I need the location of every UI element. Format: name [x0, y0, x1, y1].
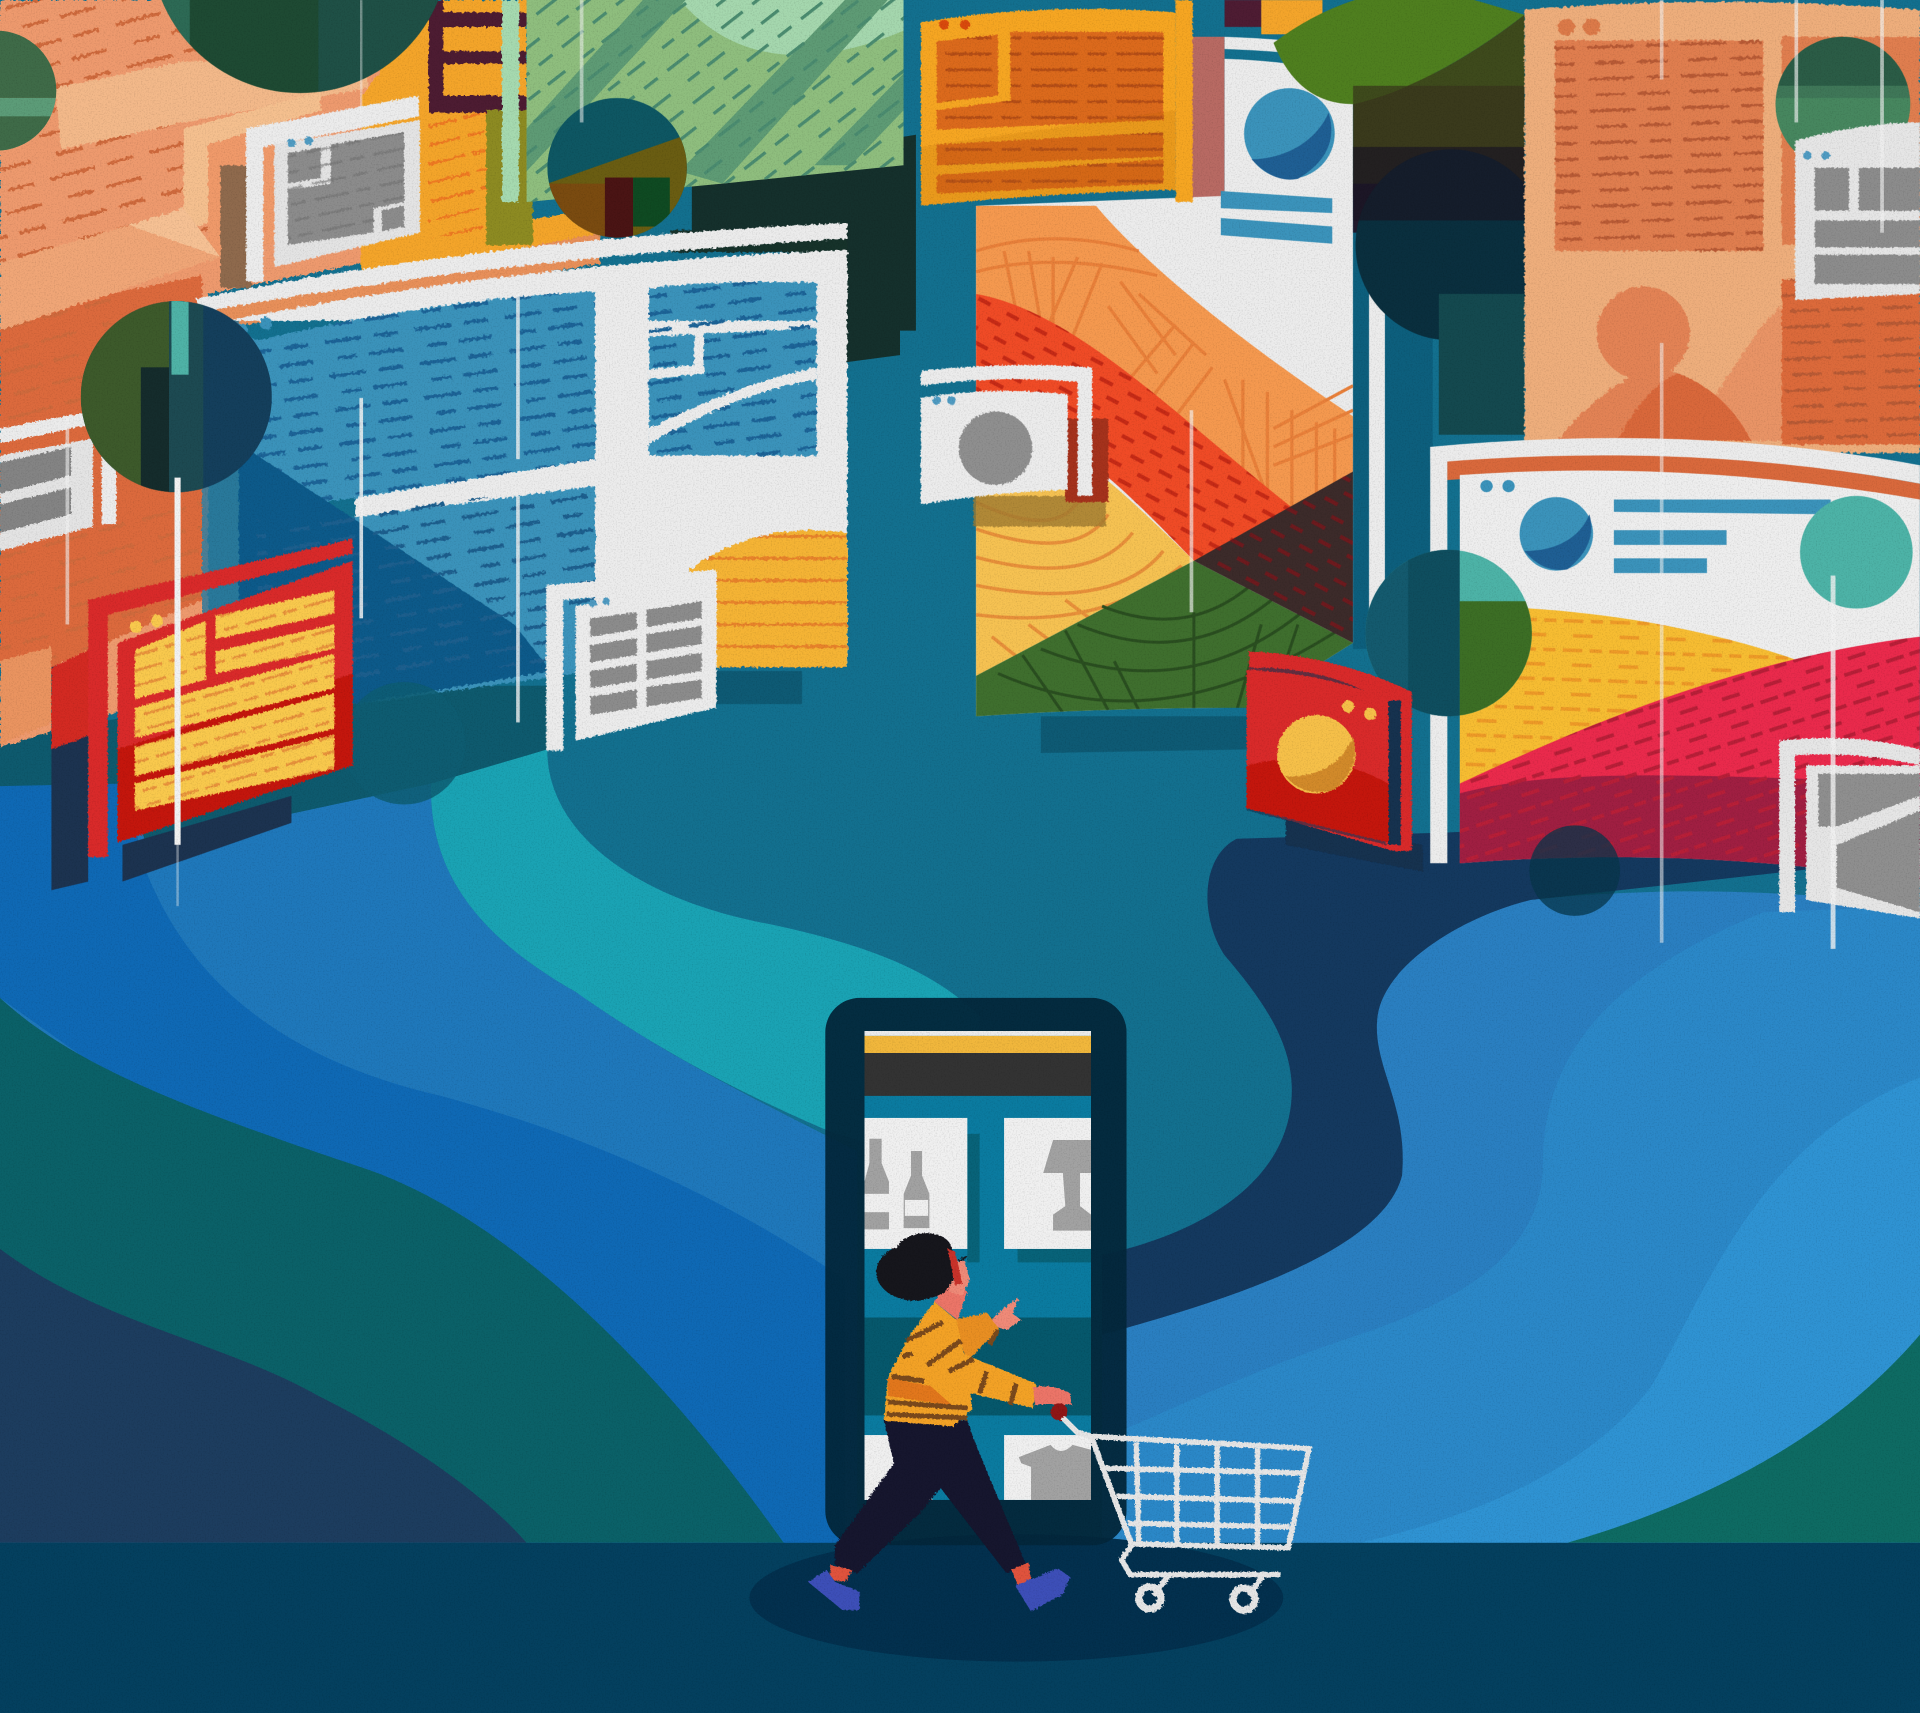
panel: small red page with yellow circle: [1247, 651, 1423, 872]
blue text bars: [1221, 191, 1332, 213]
cart wheels: [1139, 1587, 1161, 1609]
phone body: [825, 998, 1127, 1545]
ground shadow under shopper: [749, 1534, 1283, 1662]
blue avatar circle: [1520, 497, 1593, 571]
cart base: [1122, 1545, 1281, 1595]
avatar head: [1597, 287, 1690, 380]
dark maroon triangle: [1194, 471, 1353, 643]
panel: red page with yellow blocks: [51, 539, 353, 857]
red band: [976, 294, 1300, 561]
frame bar: [196, 223, 847, 312]
yellow blocks: [135, 590, 334, 811]
green band: [976, 561, 1353, 722]
yellow hill: [683, 530, 847, 667]
text block: [1555, 40, 1763, 251]
blue profile circle: [1244, 88, 1335, 179]
yellow hill: [1460, 606, 1800, 784]
orange gap behind frame: [202, 233, 600, 328]
phone screen: [864, 1031, 1091, 1500]
sweater arm pushing: [940, 1349, 1036, 1408]
left shoe: [808, 1570, 860, 1610]
circle: dark, left: [81, 301, 272, 492]
panel: amber page with purple bars, top centre: [361, 0, 600, 276]
panel: small white page with gray circle: [921, 365, 1108, 527]
circle: green, far left: [0, 24, 73, 165]
blue text bars: [1614, 500, 1831, 514]
sweater arm pointing: [953, 1313, 999, 1362]
panel: gray page bottom right: [1779, 738, 1920, 918]
dark backdrop: olive leaf and navy circle, top right: [1224, 0, 1547, 435]
circle: dark green, top left: [147, 0, 453, 98]
headband: [948, 1249, 962, 1286]
product tile: t-shirt: [1004, 1435, 1091, 1500]
neck and face: [934, 1280, 967, 1320]
panel: amber page top centre: [921, 0, 1193, 206]
panel: large white browser page with blue blocks: [196, 223, 847, 704]
product tile: partial item: [864, 1435, 933, 1500]
window dots: [235, 323, 247, 335]
circle: teal and green, right: [1365, 550, 1533, 716]
sweater shadow: [888, 1378, 953, 1406]
avatar shoulders: [1558, 361, 1751, 441]
cart handle: [1063, 1418, 1091, 1436]
panel: small gray page, top left: [246, 96, 420, 282]
circle: dark teal bottom right: [1529, 825, 1620, 916]
product tile: bottles: [864, 1118, 967, 1249]
circle: teal, bottom centre left: [343, 682, 465, 804]
product tile: lamp: [1004, 1118, 1091, 1249]
orange knitted band: [976, 206, 1353, 520]
phone: [825, 998, 1127, 1545]
pink hill: [1460, 637, 1920, 882]
ankles: [830, 1565, 852, 1582]
ground: [0, 1543, 1920, 1713]
white page body: [227, 250, 847, 686]
panel: peach profile page, top right: [1524, 2, 1920, 453]
hands: [1033, 1386, 1071, 1404]
right shoe: [1015, 1569, 1070, 1611]
panel: small gray page, far left: [0, 407, 116, 551]
panel: white page with yellow and pink hills, right: [1430, 438, 1920, 882]
dark shadow behind green page: [692, 135, 916, 362]
shadow under tall page: [1041, 716, 1249, 753]
panel: tall page with colourful waves: [967, 37, 1433, 722]
sweater body: [884, 1302, 972, 1426]
panel: peach page top left: [0, 0, 514, 747]
panel: green striped page: [527, 0, 904, 202]
right column: [1782, 279, 1920, 444]
background: flowing wave layers on the left: [0, 686, 980, 1555]
blue backing column: [202, 321, 239, 621]
circle: teal and olive, top centre: [547, 98, 687, 239]
shopper: [808, 1233, 1071, 1611]
yellow curved band: [976, 480, 1194, 676]
shadow: dark behind red page: [51, 655, 291, 890]
teal circle: [1800, 496, 1913, 609]
background: flowing wave layers on the right: [1102, 808, 1920, 1545]
panel: gray grid page, centre left: [546, 569, 716, 751]
right blue block: [649, 282, 817, 321]
dark shadow under large page: [716, 671, 802, 704]
legs: [835, 1420, 1026, 1573]
circle: green, top right: [1775, 36, 1910, 151]
shadow band across waves: [0, 686, 547, 845]
falling white streaks: [67, 0, 1882, 949]
blue article block: [239, 291, 595, 514]
lower blue block: [239, 486, 595, 704]
cart basket: [1091, 1436, 1309, 1548]
panel: small gray page, far right: [1795, 122, 1920, 300]
shopping cart: [1063, 1418, 1309, 1610]
hair: [876, 1233, 955, 1300]
sweater stripes: [887, 1322, 1016, 1418]
